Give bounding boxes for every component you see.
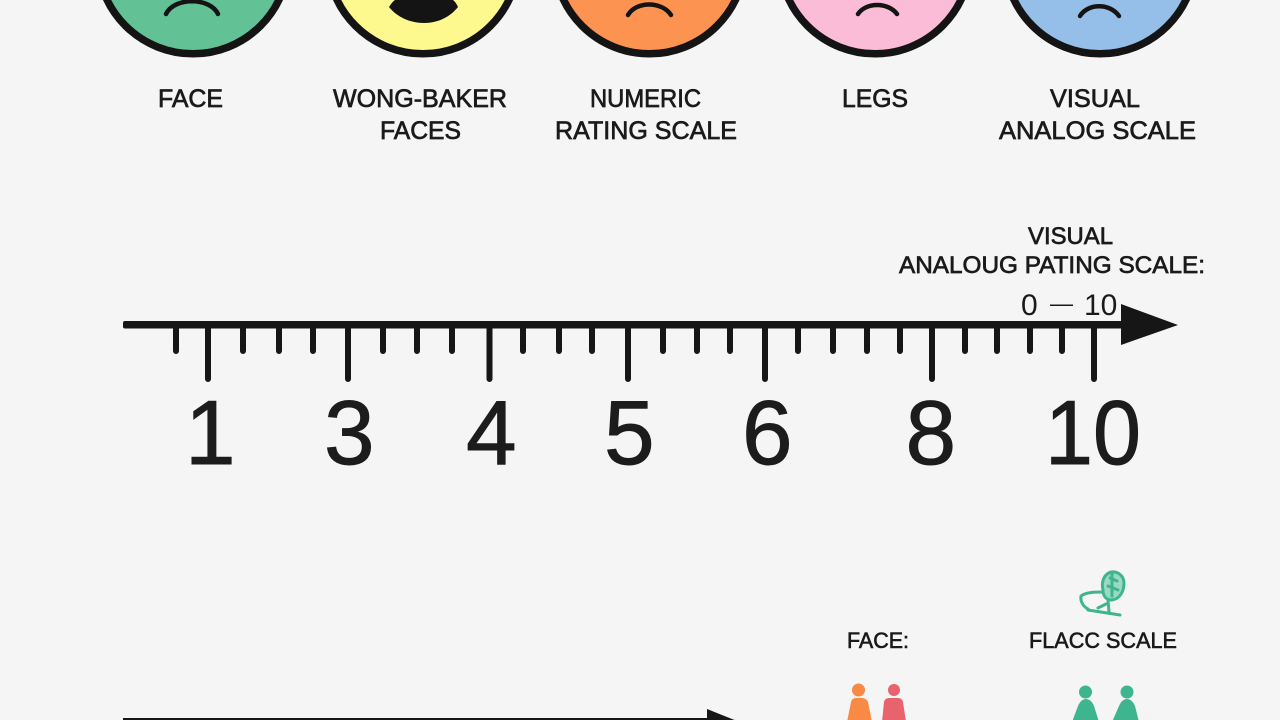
label: WONG-BAKER FACES: FACES [380, 117, 461, 145]
icon: green FACE face [98, 0, 288, 54]
label: NUMERIC RATING SCALE: RATING SCALE [555, 117, 737, 145]
icon: blue visual analog face [1004, 0, 1196, 54]
label: FLACC SCALE: FLACC SCALE [1029, 628, 1177, 653]
label: LEGS: LEGS [842, 85, 908, 113]
scale tick marks [176, 326, 1094, 379]
label: WONG-BAKER FACES [333, 85, 507, 145]
scale numbers [185, 383, 1141, 484]
heading: visual analogous rating scale [899, 223, 1205, 322]
icon: orange numeric rating face [554, 0, 745, 54]
icon: yellow Wong-Baker face [328, 0, 518, 54]
arrow: lower axis [123, 709, 737, 720]
heading: visual analogous rating scale: — [1050, 290, 1073, 316]
label: FACE: FACE [158, 85, 223, 113]
label: VISUAL ANALOG SCALE [999, 85, 1196, 145]
arrow: horizontal scale axis [123, 304, 1178, 345]
icon: green chair [1081, 572, 1124, 615]
panel: lower scale section [123, 572, 1177, 720]
icon: orange and red people [847, 684, 906, 720]
panel: numeric rating scale [123, 223, 1205, 484]
scale numbers: 3 [324, 383, 375, 484]
scale numbers: 5 [604, 383, 655, 484]
heading: visual analogous rating scale: 0 [1021, 289, 1038, 322]
icon: green people [1072, 686, 1139, 720]
heading: visual analogous rating scale: ANALOUG PATING SCALE: [899, 252, 1205, 279]
heading: visual analogous rating scale: VISUAL [1028, 223, 1113, 250]
label: FACE:: FACE: [847, 628, 909, 653]
label: WONG-BAKER FACES: WONG-BAKER [333, 85, 507, 113]
scale numbers: 10 [1045, 383, 1141, 484]
scale numbers: 1 [185, 383, 236, 484]
heading: visual analogous rating scale: 10 [1084, 289, 1117, 322]
scale numbers: 6 [742, 383, 793, 484]
panel: pain scale faces [98, 0, 1196, 145]
scale numbers: 4 [466, 383, 517, 484]
label: VISUAL ANALOG SCALE: ANALOG SCALE [999, 117, 1196, 145]
icon: pink LEGS face [780, 0, 970, 54]
label: NUMERIC RATING SCALE [555, 85, 737, 145]
label: NUMERIC RATING SCALE: NUMERIC [590, 85, 701, 113]
scale numbers: 8 [906, 383, 956, 484]
label: VISUAL ANALOG SCALE: VISUAL [1050, 85, 1140, 113]
